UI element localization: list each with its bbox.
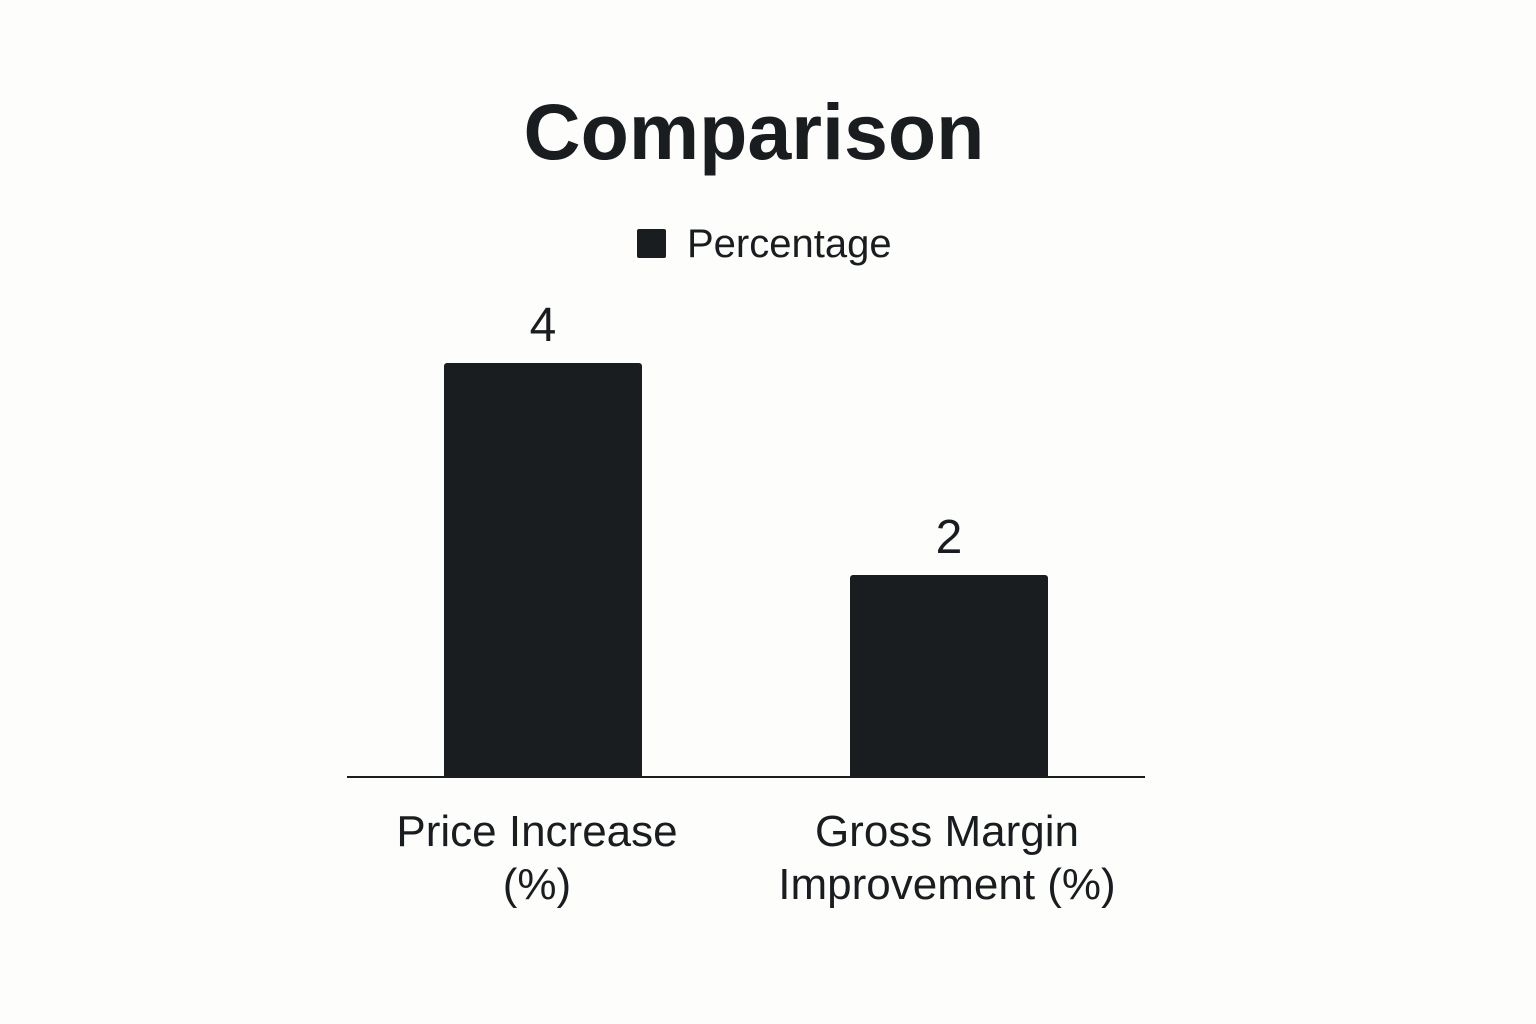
x label: gross margin: Gross Margin (815, 807, 1079, 856)
x label: price increase: (%) (503, 860, 571, 909)
x label: gross margin (778, 807, 1116, 909)
legend (637, 222, 892, 266)
legend label: Percentage (687, 222, 892, 266)
legend swatch (637, 229, 666, 258)
x label: gross margin: Improvement (%) (778, 860, 1116, 909)
bar: gross margin (850, 575, 1048, 777)
x label: price increase: Price Increase (396, 807, 678, 856)
bar: price increase (444, 363, 642, 777)
x label: price increase (396, 807, 678, 909)
title: Comparison (524, 87, 984, 176)
value label: 4: 4 (530, 299, 556, 352)
value label: 2: 2 (936, 511, 962, 564)
bar chart (347, 299, 1145, 909)
